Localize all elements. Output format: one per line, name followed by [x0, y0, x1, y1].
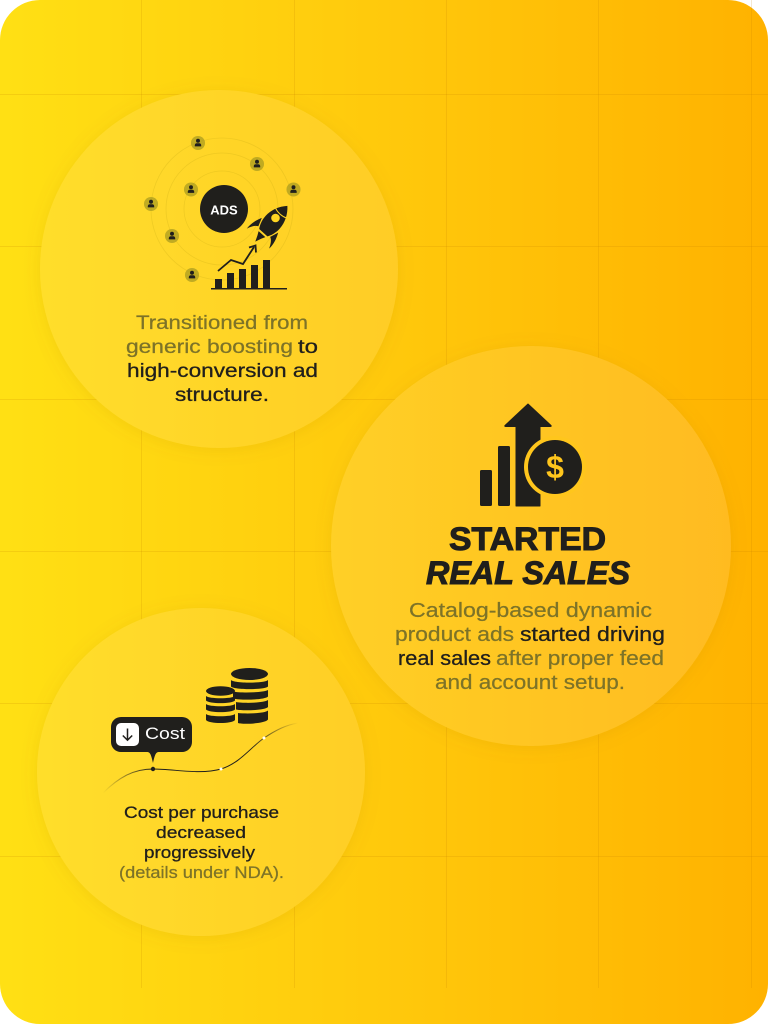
icon: ads orbit with rocket and bar chart — [144, 136, 301, 290]
text: ad structure description: to — [298, 337, 318, 358]
text: real sales description: product ads — [395, 624, 514, 646]
text: real sales description: started driving — [520, 624, 665, 646]
panel: started real sales — [331, 346, 731, 746]
text: real sales description: real sales — [398, 648, 491, 670]
text: ad structure description: Transitioned from — [136, 313, 308, 334]
text: ad structure description: generic boosting — [126, 337, 293, 358]
panel: ad structure — [40, 90, 398, 448]
icon: coin stacks — [206, 668, 268, 724]
text: cost description: decreased — [156, 824, 246, 842]
heading: started real sales: STARTED — [449, 521, 606, 557]
callout: cost tag: Cost — [145, 725, 185, 743]
text: ad structure description: structure. — [175, 385, 269, 406]
text: cost description: Cost per purchase — [124, 804, 279, 822]
icon: rising arrow with dollar coin — [480, 404, 586, 506]
heading: started real sales — [426, 521, 631, 591]
chart: declining cost curve — [103, 723, 298, 793]
panel: cost per purchase — [37, 608, 365, 936]
icon: ads orbit with rocket and bar chart: ADS — [210, 202, 238, 218]
text: real sales description: Catalog-based dynamic — [409, 600, 652, 622]
text: cost description — [119, 804, 284, 882]
icon: rising arrow with dollar coin: $ — [546, 449, 564, 485]
text: cost description: (details under NDA). — [119, 864, 284, 882]
text: real sales description: after proper feed — [496, 648, 664, 670]
text: real sales description — [395, 600, 665, 694]
callout: cost tag — [111, 717, 192, 763]
text: ad structure description — [126, 313, 318, 406]
heading: started real sales: REAL SALES — [426, 555, 631, 591]
text: real sales description: and account setup. — [435, 672, 625, 694]
text: cost description: progressively — [144, 844, 256, 862]
text: ad structure description: high-conversion ad — [127, 361, 318, 382]
